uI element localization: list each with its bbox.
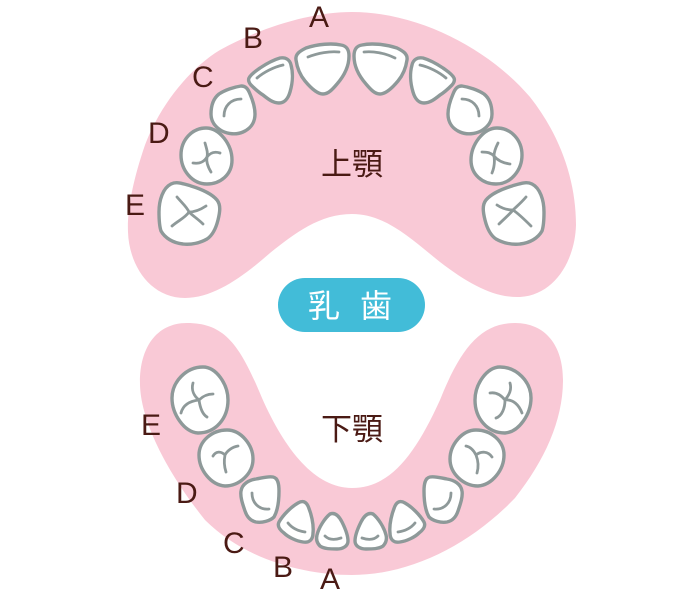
upper tooth D right [471,128,522,184]
lower tooth B right [390,502,425,542]
lower tooth A left [317,513,348,549]
upper label C: C [192,61,214,94]
upper tooth D left [181,128,232,184]
lower label B: B [273,551,293,584]
label: lower jaw: 下顎 [321,412,383,447]
lower label E: E [141,409,161,442]
upper tooth B left [249,58,292,103]
upper gum [128,12,576,298]
upper label A: A [309,1,329,34]
lower label C: C [223,527,245,560]
lower tooth E right [475,367,531,433]
lower tooth C left [241,477,279,522]
lower tooth B left [278,502,313,542]
upper tooth E left [159,183,220,244]
lower tooth D right [450,430,504,486]
lower tooth C right [424,477,462,522]
upper tooth C right [448,86,492,134]
pill title [278,278,425,332]
lower gum [140,323,563,575]
lower tooth A right [355,513,386,549]
lower label A: A [320,563,340,596]
upper tooth A right [354,44,407,94]
upper tooth A left [296,44,349,94]
upper tooth C left [211,86,255,134]
upper label B: B [243,22,263,55]
upper tooth B right [411,58,454,103]
lower tooth D left [199,430,253,486]
upper tooth E right [483,183,544,244]
lower label D: D [176,477,198,510]
pill title: 乳歯 [308,288,392,324]
upper label D: D [148,117,170,150]
upper label E: E [125,189,145,222]
label: upper jaw: 上顎 [321,147,383,182]
lower tooth E left [172,367,228,433]
